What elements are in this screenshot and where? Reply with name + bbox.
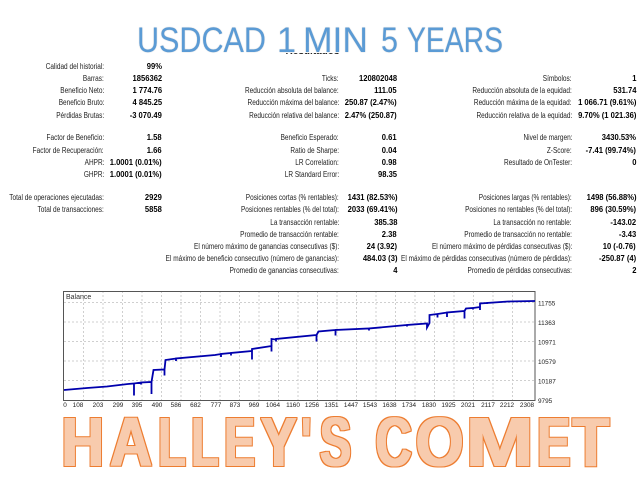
- panel: equity drawdown and loss statistics: Símbolos:: [543, 74, 572, 83]
- panel: balance drawdown and trade statistics: Promedio de ganancias consecutivas:: [230, 266, 339, 275]
- panel: balance drawdown and trade statistics: Reducción relativa del balance:: [249, 110, 339, 120]
- panel: history and profit statistics: 1.58: [147, 133, 162, 142]
- panel: equity drawdown and loss statistics: 3430.53%: [602, 133, 636, 142]
- panel: balance drawdown and trade statistics: Beneficio Esperado:: [281, 133, 339, 142]
- panel: equity drawdown and loss statistics: [401, 74, 636, 275]
- x axis labels: 2212: [500, 402, 515, 409]
- panel: history and profit statistics: [9, 62, 162, 214]
- panel: equity drawdown and loss statistics: 0: [632, 158, 636, 167]
- panel: balance drawdown and trade statistics: Posiciones cortas (% rentables):: [246, 192, 339, 202]
- panel: balance drawdown and trade statistics: 2033 (69.41%): [347, 205, 397, 214]
- panel: balance drawdown and trade statistics: [166, 74, 398, 275]
- y axis labels: 11755: [538, 300, 556, 308]
- panel: history and profit statistics: 2929: [145, 192, 162, 202]
- x axis labels: 1638: [382, 402, 397, 409]
- x axis labels: 0: [63, 402, 67, 409]
- panel: equity drawdown and loss statistics: Resultado de OnTester:: [504, 158, 572, 167]
- panel: balance drawdown and trade statistics: 0.98: [382, 158, 397, 167]
- panel: history and profit statistics: 1.0001 (0.01%): [110, 158, 162, 167]
- panel: balance drawdown and trade statistics: 250.87 (2.47%): [345, 98, 397, 107]
- x axis labels: [63, 402, 535, 409]
- panel: equity drawdown and loss statistics: 9.70% (1 021.36): [578, 110, 636, 120]
- y axis labels: 10187: [538, 378, 556, 386]
- x axis labels: 969: [249, 402, 260, 409]
- panel: balance drawdown and trade statistics: 2.47% (250.87): [345, 110, 397, 120]
- title: 5: [381, 21, 398, 60]
- panel: equity drawdown and loss statistics: Reducción absoluta de la equidad:: [473, 86, 572, 95]
- x axis labels: 395: [132, 402, 143, 409]
- panel: equity drawdown and loss statistics: -250.87 (4): [599, 254, 636, 263]
- x axis labels: 777: [211, 402, 222, 409]
- title: USDCAD: [137, 21, 266, 60]
- y axis labels: 9795: [538, 398, 553, 405]
- title: MIN: [303, 21, 368, 60]
- panel: history and profit statistics: Barras:: [83, 74, 104, 83]
- panel: history and profit statistics: 5858: [145, 205, 162, 214]
- panel: balance drawdown and trade statistics: 4: [393, 266, 397, 275]
- x axis labels: 873: [230, 402, 241, 409]
- panel: equity drawdown and loss statistics: 896 (30.59%): [590, 205, 636, 214]
- panel: balance drawdown and trade statistics: Ticks:: [322, 74, 339, 83]
- panel: balance drawdown and trade statistics: 0.04: [382, 146, 397, 154]
- panel: history and profit statistics: Calidad del historial:: [46, 62, 104, 70]
- panel: history and profit statistics: Total de operaciones ejecutadas:: [9, 192, 104, 202]
- panel: history and profit statistics: Beneficio Neto:: [60, 86, 104, 95]
- panel: equity drawdown and loss statistics: 1498 (56.88%): [586, 192, 636, 202]
- panel: equity drawdown and loss statistics: -7.41 (99.74%): [586, 146, 636, 154]
- x axis labels: 2117: [481, 402, 495, 409]
- panel: equity drawdown and loss statistics: Z-Score:: [547, 146, 572, 154]
- banner title: Halley's Comet: [62, 405, 610, 475]
- panel: equity drawdown and loss statistics: La transacción no rentable:: [494, 218, 572, 226]
- panel: balance drawdown and trade statistics: Reducción máxima del balance:: [247, 98, 339, 107]
- panel: history and profit statistics: Factor de Beneficio:: [46, 133, 104, 142]
- panel: balance drawdown and trade statistics: El número máximo de ganancias consecutivas ($):: [194, 242, 339, 251]
- balance line chart: [63, 291, 556, 409]
- panel: history and profit statistics: 1856362: [132, 74, 162, 83]
- panel: balance drawdown and trade statistics: LR Correlation:: [295, 158, 339, 167]
- panel: equity drawdown and loss statistics: Nivel de margen:: [523, 133, 572, 142]
- x axis labels: 490: [152, 402, 163, 409]
- panel: equity drawdown and loss statistics: Promedio de pérdidas consecutivas:: [468, 266, 572, 275]
- panel: history and profit statistics: AHPR:: [84, 158, 104, 167]
- panel: equity drawdown and loss statistics: El máximo de pérdidas consecutivas (número de pérdidas):: [401, 254, 572, 263]
- x axis labels: 1925: [441, 402, 456, 409]
- panel: history and profit statistics: GHPR:: [83, 170, 104, 179]
- x axis labels: 108: [73, 402, 84, 409]
- panel: equity drawdown and loss statistics: 531.74: [613, 86, 636, 95]
- y axis labels: 10579: [538, 359, 556, 366]
- y axis labels: 11363: [538, 320, 556, 327]
- balance curve: [64, 301, 535, 396]
- panel: equity drawdown and loss statistics: Promedio de transacción no rentable:: [464, 230, 572, 239]
- panel: equity drawdown and loss statistics: Posiciones largas (% rentables):: [479, 192, 572, 202]
- panel: balance drawdown and trade statistics: 484.03 (3): [362, 254, 397, 263]
- title: 1: [277, 21, 296, 60]
- panel: balance drawdown and trade statistics: Reducción absoluta del balance:: [245, 86, 339, 95]
- panel: equity drawdown and loss statistics: Reducción relativa de la equidad:: [476, 110, 572, 120]
- x axis labels: 1447: [344, 402, 359, 409]
- x axis labels: 1256: [305, 402, 320, 409]
- x axis labels: 2308: [520, 402, 535, 409]
- x axis labels: 299: [113, 402, 124, 409]
- x axis labels: 1543: [363, 402, 378, 409]
- panel: balance drawdown and trade statistics: La transacción rentable:: [270, 218, 339, 226]
- panel: equity drawdown and loss statistics: Reducción máxima de la equidad:: [474, 98, 572, 107]
- x axis labels: 1064: [266, 402, 281, 409]
- panel: balance drawdown and trade statistics: Promedio de transacción rentable:: [240, 230, 339, 239]
- panel: equity drawdown and loss statistics: 2: [632, 266, 636, 275]
- panel: history and profit statistics: 99%: [147, 62, 162, 70]
- panel: balance drawdown and trade statistics: 111.05: [375, 86, 397, 95]
- y axis labels: 10971: [538, 340, 556, 346]
- panel: balance drawdown and trade statistics: 98.35: [378, 170, 397, 179]
- panel: history and profit statistics: 1 774.76: [132, 86, 162, 95]
- panel: equity drawdown and loss statistics: 10 (-0.76): [603, 242, 636, 251]
- panel: balance drawdown and trade statistics: El máximo de beneficio consecutivo (número de ganancias):: [166, 254, 339, 263]
- chart legend label: Balance: [66, 294, 91, 301]
- x axis labels: 586: [171, 402, 182, 409]
- panel: equity drawdown and loss statistics: -143.02: [610, 218, 636, 226]
- panel: equity drawdown and loss statistics: 1 066.71 (9.61%): [578, 98, 636, 107]
- panel: history and profit statistics: -3 070.49: [130, 110, 162, 120]
- x axis labels: 1351: [324, 402, 339, 409]
- x axis labels: 682: [190, 402, 201, 409]
- panel: equity drawdown and loss statistics: El número máximo de pérdidas consecutivas ($):: [432, 242, 572, 251]
- panel: history and profit statistics: 1.66: [147, 146, 162, 154]
- panel: balance drawdown and trade statistics: Ratio de Sharpe:: [290, 146, 339, 154]
- panel: history and profit statistics: Pérdidas Brutas:: [56, 110, 104, 120]
- title: [137, 21, 503, 60]
- x axis labels: 1734: [402, 402, 417, 409]
- panel: balance drawdown and trade statistics: 385.38: [374, 218, 397, 226]
- chart frame: [64, 292, 535, 400]
- panel: equity drawdown and loss statistics: -3.43: [619, 230, 636, 239]
- y axis labels: [538, 300, 556, 405]
- panel: balance drawdown and trade statistics: Posiciones rentables (% del total):: [241, 205, 339, 214]
- panel: balance drawdown and trade statistics: 24 (3.92): [367, 242, 397, 251]
- x axis labels: 203: [93, 402, 104, 409]
- panel: history and profit statistics: 1.0001 (0.01%): [110, 170, 162, 179]
- panel: balance drawdown and trade statistics: 0.61: [382, 133, 397, 142]
- panel: balance drawdown and trade statistics: 120802048: [359, 74, 397, 83]
- panel: history and profit statistics: Beneficio Bruto:: [58, 98, 104, 107]
- panel: equity drawdown and loss statistics: Posiciones no rentables (% del total):: [465, 205, 572, 214]
- panel: history and profit statistics: Factor de Recuperación:: [33, 146, 104, 154]
- panel: balance drawdown and trade statistics: 1431 (82.53%): [347, 192, 397, 202]
- panel: balance drawdown and trade statistics: 2.38: [382, 230, 397, 239]
- x axis labels: 1830: [422, 402, 437, 409]
- panel: history and profit statistics: Total de transacciones:: [38, 205, 104, 214]
- panel: history and profit statistics: 4 845.25: [132, 98, 162, 107]
- x axis labels: 1160: [286, 402, 300, 409]
- x axis labels: 2021: [461, 402, 476, 409]
- panel: balance drawdown and trade statistics: LR Standard Error:: [285, 170, 339, 179]
- panel: equity drawdown and loss statistics: 1: [632, 74, 636, 83]
